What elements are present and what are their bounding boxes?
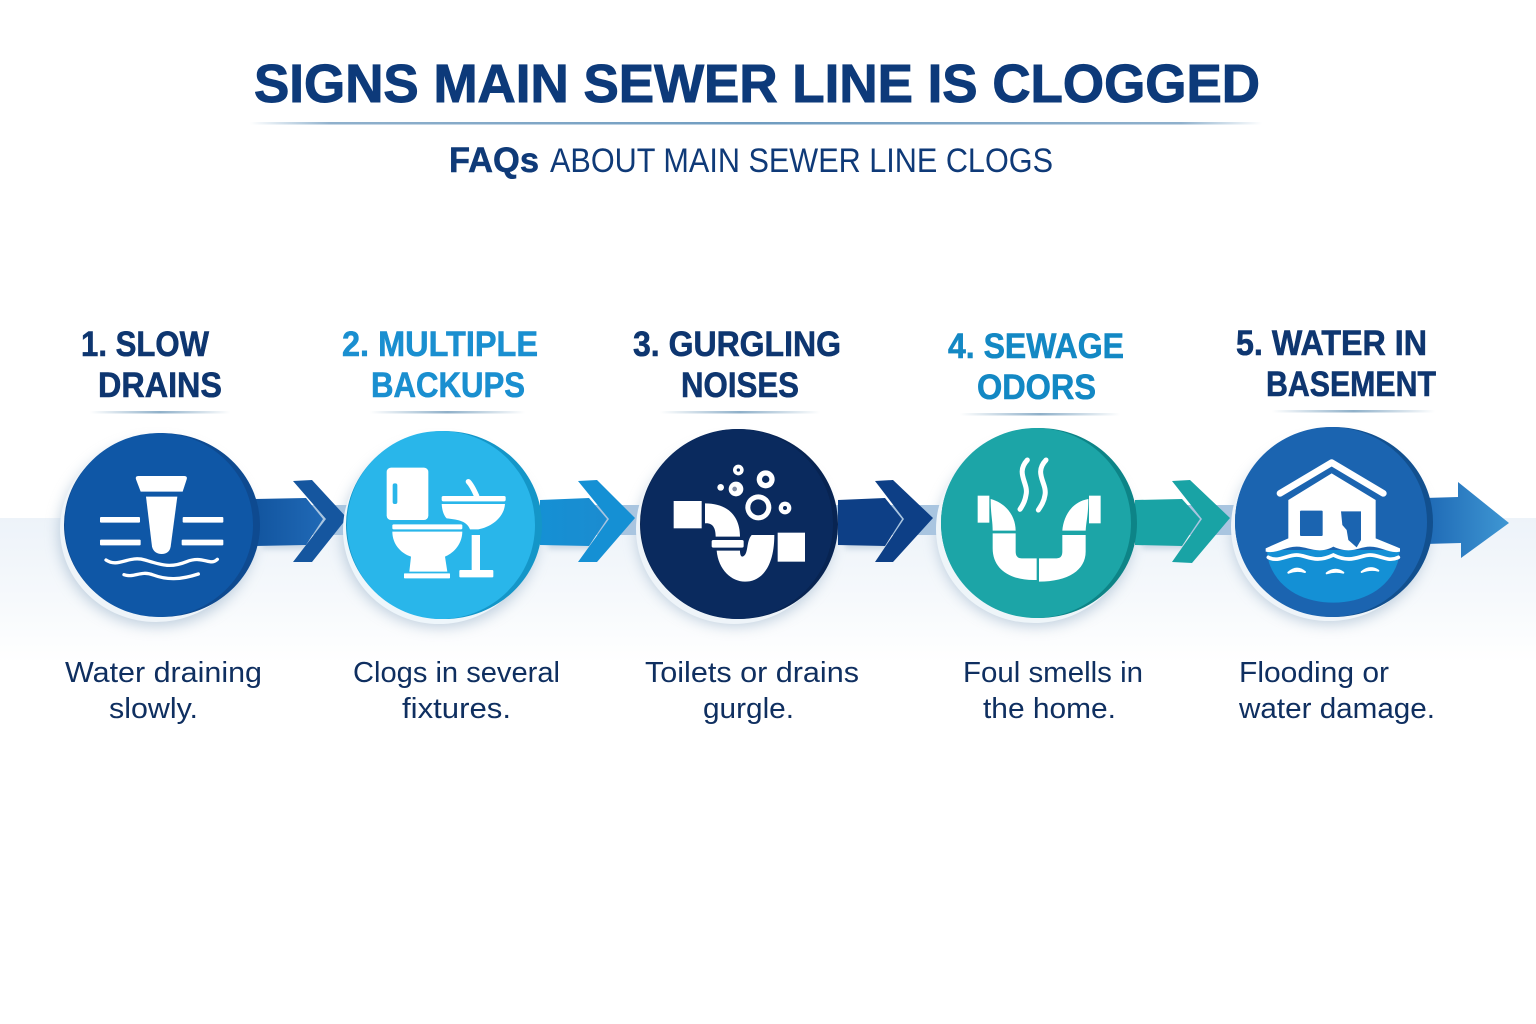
icon: gurgling pipe bbox=[674, 465, 805, 582]
description 3: Toilets or drains bbox=[645, 657, 859, 689]
step 2 bbox=[342, 325, 635, 725]
description 5: water damage. bbox=[1238, 693, 1435, 725]
step 5 bbox=[1231, 324, 1509, 725]
heading: slow drains bbox=[81, 325, 222, 405]
description 3 bbox=[645, 657, 859, 725]
heading underline bbox=[90, 411, 230, 414]
heading underline bbox=[960, 413, 1120, 416]
circle and arrow shadows bbox=[59, 440, 1428, 627]
step 1 bbox=[60, 325, 347, 725]
description 4: Foul smells in bbox=[963, 657, 1143, 689]
arrow 1 bbox=[255, 480, 347, 562]
heading: multiple backups: 2. MULTIPLE bbox=[342, 325, 538, 364]
connector strip bbox=[255, 505, 1240, 535]
description 4: the home. bbox=[983, 693, 1116, 725]
description 1: Water draining bbox=[65, 657, 262, 689]
circle 3 bbox=[636, 429, 838, 624]
step 4 bbox=[936, 327, 1230, 725]
heading: gurgling noises: 3. GURGLING bbox=[633, 325, 841, 364]
icon: flooded house bbox=[1266, 463, 1400, 603]
subtitle: FAQs bbox=[449, 141, 539, 180]
title rule bbox=[250, 122, 1262, 124]
description 3: gurgle. bbox=[703, 693, 794, 725]
heading: sewage odors: ODORS bbox=[977, 368, 1096, 407]
heading: sewage odors bbox=[948, 327, 1124, 407]
description 5 bbox=[1238, 657, 1435, 725]
arrow 2 bbox=[540, 480, 635, 562]
subtitle: ABOUT MAIN SEWER LINE CLOGS bbox=[550, 142, 1053, 180]
heading: sewage odors: 4. SEWAGE bbox=[948, 327, 1124, 366]
circle 1 bbox=[60, 433, 260, 622]
heading underline bbox=[1272, 410, 1435, 412]
icon: smelly pipes bbox=[978, 460, 1101, 582]
heading: gurgling noises: NOISES bbox=[681, 366, 799, 405]
step 3 bbox=[633, 325, 933, 725]
arrow 5 bbox=[1425, 482, 1509, 558]
description 1: slowly. bbox=[109, 693, 198, 725]
description 2 bbox=[353, 657, 560, 725]
title: SIGNS MAIN SEWER LINE IS CLOGGED bbox=[254, 54, 1260, 114]
heading: water in basement bbox=[1236, 324, 1436, 404]
description 2: Clogs in several bbox=[353, 657, 560, 689]
description 5: Flooding or bbox=[1239, 657, 1389, 689]
heading: gurgling noises bbox=[633, 325, 841, 405]
heading: slow drains: 1. SLOW bbox=[81, 325, 209, 364]
icon: toilet and sink bbox=[387, 468, 506, 578]
heading: water in basement: BASEMENT bbox=[1266, 365, 1436, 404]
heading underline bbox=[370, 411, 525, 414]
circle 5 bbox=[1231, 427, 1433, 621]
arrow 3 bbox=[838, 480, 933, 562]
heading: slow drains: DRAINS bbox=[98, 366, 222, 405]
description 1 bbox=[65, 657, 262, 725]
heading: multiple backups bbox=[342, 325, 538, 405]
heading underline bbox=[660, 411, 820, 414]
heading: water in basement: 5. WATER IN bbox=[1236, 324, 1427, 363]
arrow 4 bbox=[1135, 480, 1230, 563]
description 4 bbox=[963, 657, 1143, 725]
icon: slow drain bbox=[100, 476, 223, 579]
description 2: fixtures. bbox=[402, 693, 511, 725]
circle 2 bbox=[343, 431, 542, 624]
heading: multiple backups: BACKUPS bbox=[371, 366, 525, 405]
background band bbox=[0, 518, 1536, 663]
circle 4 bbox=[936, 428, 1137, 623]
